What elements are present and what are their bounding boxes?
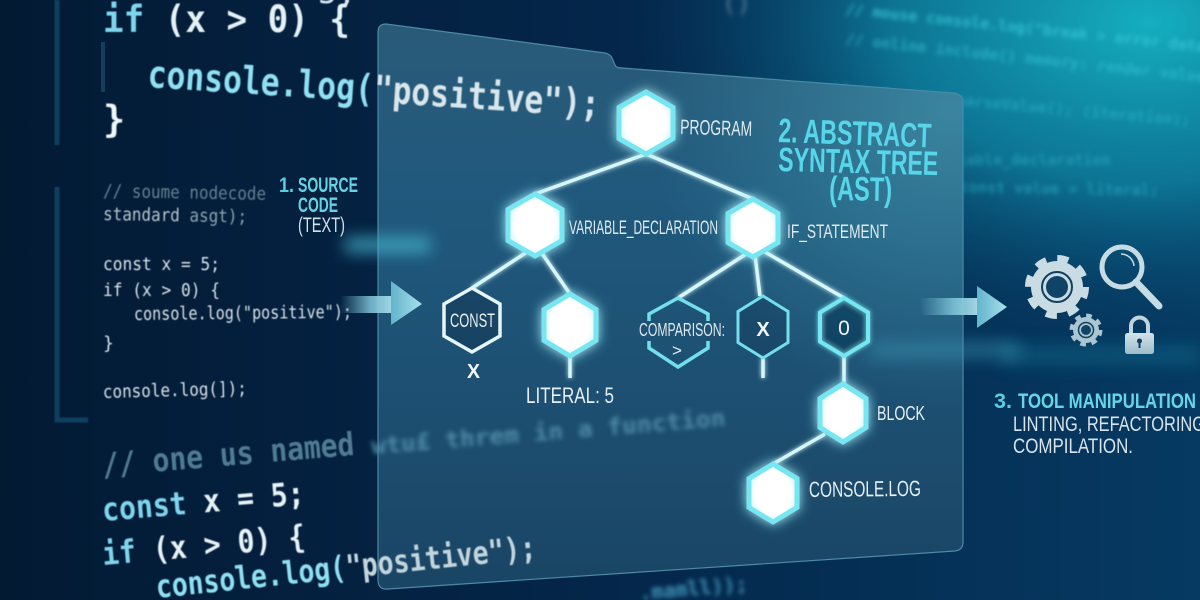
label: 3. tool manipulation — [994, 390, 1200, 458]
node: zero: 0 — [838, 317, 850, 340]
node: console.log — [749, 464, 921, 522]
source code, small middle block: console.log("positive"); — [134, 302, 352, 325]
source code, large lower block: const x = 5; — [100, 474, 306, 529]
panel: abstract syntax tree card — [345, 24, 1020, 589]
label: 1. source code: SOURCE — [298, 174, 358, 197]
node: block — [820, 384, 925, 442]
source code, small middle block — [103, 181, 352, 403]
icon: large gear — [1029, 259, 1085, 315]
node: literal — [526, 294, 614, 408]
icon: padlock — [1125, 318, 1154, 354]
node: x — [738, 296, 788, 358]
source code, small middle block: standard asgt); — [103, 204, 247, 228]
node: program: PROGRAM — [680, 116, 752, 141]
icon: magnifying glass — [1102, 247, 1159, 306]
node: comparison: COMPARISON: — [639, 320, 725, 340]
label: 1. source code: 1. — [279, 174, 294, 197]
heading: 2. abstract syntax tree: 2. ABSTRACT — [778, 112, 932, 155]
source code, small middle block: } — [103, 333, 114, 354]
label: 3. tool manipulation: COMPILATION. — [1013, 435, 1133, 458]
label: 3. tool manipulation: 3. — [994, 390, 1012, 413]
source code, large lower block: if (x > 0) { — [100, 517, 307, 573]
label: 1. source code — [279, 174, 358, 237]
blurred background code, top right: variable_declaration — [930, 151, 1111, 169]
node: zero — [820, 298, 868, 356]
source code, small middle block: // soume nodecode — [103, 181, 266, 205]
heading: 2. abstract syntax tree: (AST) — [829, 170, 893, 209]
icon: small gear — [1072, 316, 1100, 344]
node: const: CONST — [450, 311, 495, 332]
source code, large lower block: // one us named — [100, 425, 356, 484]
node: comparison: > — [672, 341, 682, 360]
blurred background code, top right: const value = literal; — [960, 178, 1159, 199]
node: literal: LITERAL: 5 — [526, 383, 614, 408]
source code, large top block — [103, 0, 601, 141]
source code, small middle block: console.log(]); — [103, 378, 247, 403]
source code, large top block: console.log("positive"); — [146, 52, 601, 126]
source code, large lower block — [100, 406, 748, 600]
node: x: X — [756, 319, 770, 341]
node: program — [619, 92, 752, 154]
node: const: X — [467, 361, 481, 383]
node: variable declaration: VARIABLE_DECLARATION — [569, 218, 718, 239]
node: const — [444, 288, 500, 383]
node: if statement — [728, 199, 888, 257]
blurred background code, top right: // online include() memory: render value — [845, 30, 1200, 86]
node: block: BLOCK — [877, 403, 925, 425]
node: comparison — [639, 298, 725, 367]
tree connectors — [472, 154, 844, 464]
blurred background code, top right: if (a.b == c) parseValue(); (iteration); — [830, 80, 1191, 129]
arrow: source to tree — [340, 281, 422, 325]
source code, small middle block: if (x > 0) { — [103, 280, 220, 301]
heading: 2. abstract syntax tree — [778, 112, 939, 209]
arrow: tree to tools — [920, 286, 1007, 328]
node: variable declaration — [508, 194, 718, 256]
source code, large top block: } — [103, 98, 125, 141]
heading: 2. abstract syntax tree: SYNTAX TREE — [778, 141, 939, 183]
label: 1. source code: CODE — [298, 194, 338, 217]
label: 1. source code: (TEXT) — [298, 214, 345, 237]
source code, large lower block: wtu£ threm in a function — [370, 406, 726, 460]
source code, small middle block: const x = 5; — [103, 254, 220, 275]
blurred background code, top right — [722, 0, 1200, 199]
node: console.log: CONSOLE.LOG — [809, 476, 921, 502]
node: if statement: IF_STATEMENT — [787, 222, 888, 243]
